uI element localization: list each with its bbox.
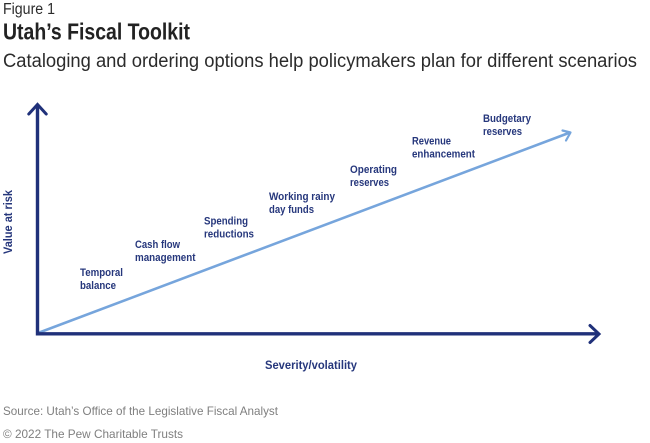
y axis label: Value at risk bbox=[3, 189, 15, 254]
copyright note: © 2022 The Pew Charitable Trusts bbox=[3, 427, 183, 441]
step: working rainy day funds: Working rainy bbox=[269, 191, 336, 203]
step: cash flow management: Cash flow bbox=[135, 239, 180, 251]
step: spending reductions bbox=[204, 216, 254, 240]
step: temporal balance bbox=[80, 267, 123, 292]
title: Utah’s Fiscal Toolkit bbox=[3, 18, 190, 44]
step: operating reserves bbox=[350, 164, 397, 189]
step: operating reserves: reserves bbox=[350, 177, 389, 189]
step: working rainy day funds bbox=[269, 191, 336, 216]
step: operating reserves: Operating bbox=[350, 164, 397, 176]
step: cash flow management: management bbox=[135, 252, 196, 264]
step: working rainy day funds: day funds bbox=[269, 204, 314, 216]
step: revenue enhancement: enhancement bbox=[412, 148, 475, 160]
diagonal trend arrow bbox=[38, 130, 570, 333]
axes with arrowheads bbox=[29, 104, 599, 342]
step: budgetary reserves: Budgetary bbox=[483, 113, 532, 125]
step: spending reductions: Spending bbox=[204, 216, 248, 228]
source note: Source: Utah’s Office of the Legislative Fiscal Analyst bbox=[3, 404, 279, 418]
step: budgetary reserves bbox=[483, 113, 532, 138]
step: budgetary reserves: reserves bbox=[483, 126, 522, 138]
step: revenue enhancement bbox=[412, 136, 475, 160]
step: temporal balance: balance bbox=[80, 280, 116, 292]
step: revenue enhancement: Revenue bbox=[412, 136, 451, 148]
subtitle: Cataloging and ordering options help policymakers plan for different scenarios bbox=[3, 51, 637, 72]
step: cash flow management bbox=[135, 239, 196, 264]
step: spending reductions: reductions bbox=[204, 228, 254, 240]
x axis label: Severity/volatility bbox=[265, 358, 357, 372]
step: temporal balance: Temporal bbox=[80, 267, 123, 279]
figure number: Figure 1 bbox=[3, 1, 55, 18]
